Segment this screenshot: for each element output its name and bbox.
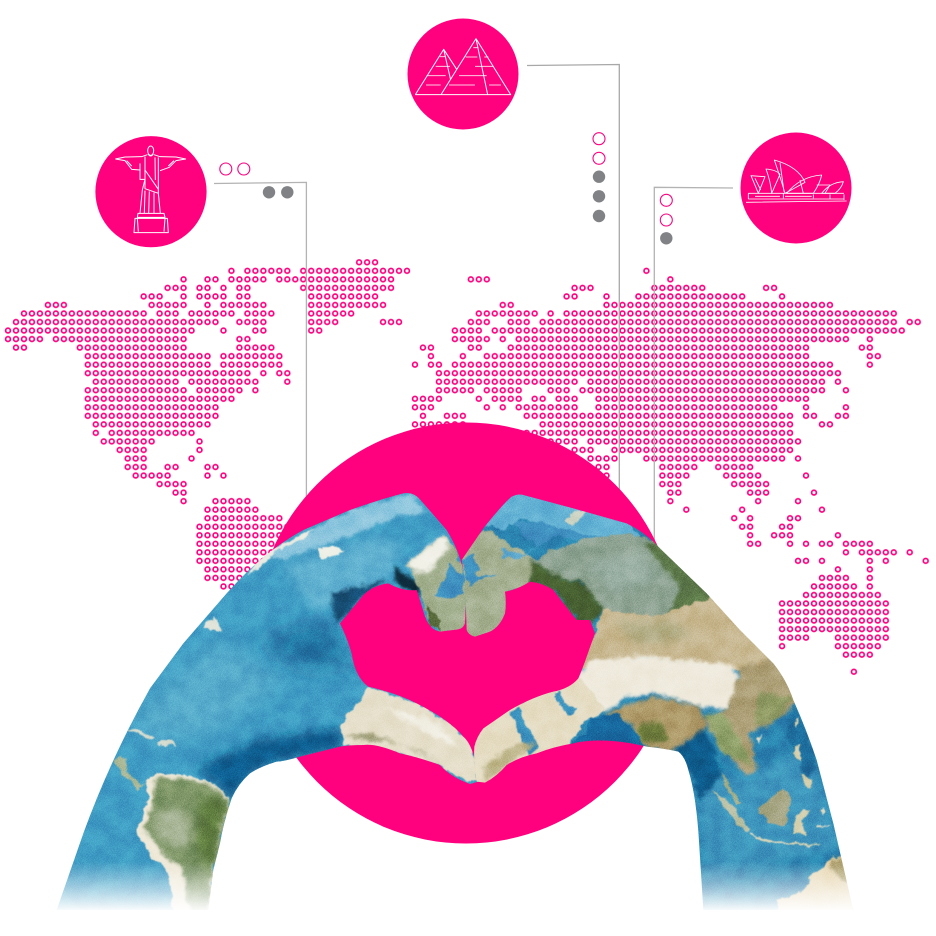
land: central Asia desert	[578, 597, 780, 670]
map: North America and Greenland	[4, 258, 411, 505]
land: India	[607, 697, 707, 752]
land: finger top ocean	[484, 494, 640, 538]
land: Taiwan and small islands	[757, 735, 832, 827]
land: China and Southeast Asia	[703, 657, 800, 775]
land: Borneo	[758, 788, 792, 827]
land: South America	[137, 773, 230, 913]
land: Sumatra and Malay Peninsula	[713, 790, 750, 833]
texture: skin grain	[66, 494, 477, 896]
icon: Egyptian pyramids	[408, 18, 518, 130]
land: Sulawesi and Philippines	[793, 808, 810, 833]
ocean: Arabian Sea	[572, 712, 644, 746]
land: Africa on thumb	[340, 687, 478, 784]
progress dots: Sydney Opera House	[660, 194, 672, 244]
icon: Sydney Opera House	[740, 132, 852, 244]
land: ice islands and clouds	[203, 617, 222, 632]
texture: coarse mottling	[463, 500, 846, 883]
connector line: Christ the Redeemer to map	[214, 182, 306, 510]
bottom fade of the forearms	[0, 862, 936, 912]
texture: skin grain	[462, 494, 846, 896]
shading: dark palm and wrist	[257, 620, 350, 667]
land: Java and lesser islands	[750, 835, 820, 845]
land: Europe on fingertips	[407, 535, 467, 633]
progress dots: Christ the Redeemer	[220, 163, 293, 198]
progress dots: pyramids	[593, 133, 605, 222]
map: Eurasia and Africa	[411, 267, 922, 514]
icon: Christ the Redeemer	[95, 136, 207, 247]
land: Arabia on thumb	[470, 675, 607, 787]
land: Himalaya snow	[575, 655, 742, 712]
right hand painted with Europe, Asia and Australia	[462, 494, 852, 910]
land: Central America and Caribbean	[113, 756, 147, 788]
texture: coarse mottling	[70, 493, 465, 882]
dotted world map	[4, 258, 930, 676]
map: South America	[196, 497, 291, 591]
connector line: pyramids to map	[527, 64, 619, 500]
ocean shading	[693, 747, 840, 880]
large pink circle	[256, 422, 676, 844]
shading: lit top finger	[263, 493, 427, 560]
left hand painted with the Americas	[57, 493, 478, 910]
land: northern Asia	[530, 532, 682, 617]
land: Australia	[776, 854, 853, 910]
connector line: Sydney Opera House to map	[654, 187, 733, 540]
land: fingertips	[462, 530, 534, 637]
map: Southeast Asia and Australia	[730, 514, 930, 676]
